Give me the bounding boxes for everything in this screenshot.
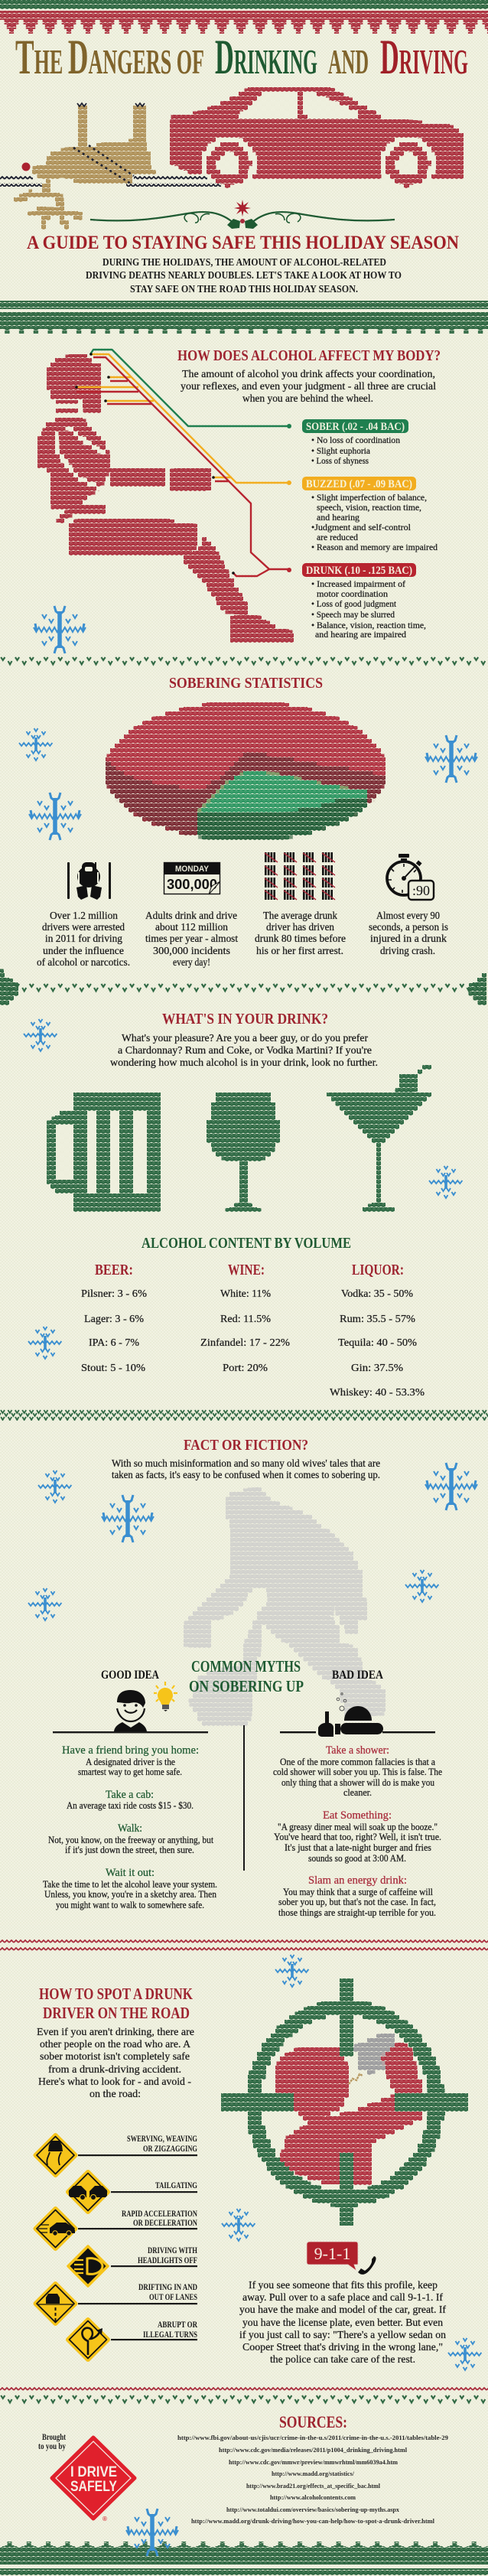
badge: drunk: DRUNK (.10 - .125 BAC): [306, 565, 412, 577]
list: sober effects: • Slight euphoria: [311, 445, 371, 456]
list: buzzed effects: speech, vision, reaction time,: [317, 502, 421, 513]
knit martini glass: [328, 1066, 430, 1213]
call to action paragraph: [239, 2280, 446, 2366]
column: beer: Pilsner: 3 - 6%: [81, 1288, 147, 1300]
icon: calendar 300,000: [164, 862, 220, 894]
column: good ideas: Wait it out:: [106, 1867, 155, 1879]
panel: sources and sponsor: [0, 2412, 488, 2575]
knit beer mug: [48, 1093, 159, 1212]
panel: how to spot a drunk driver: [35, 1955, 481, 2370]
logo: I Drive Safely: I DRIVE: [70, 2464, 117, 2480]
label: headlights off: DRIVING WITH: [148, 2246, 197, 2255]
icon: snowflake: [222, 2209, 255, 2241]
caption: incidents: 300,000 incidents: [153, 945, 230, 956]
intro paragraph: The amount of alcohol you drink affects your coordination,: [182, 368, 435, 379]
title: THE DANGERS OF: [15, 30, 204, 85]
column: wine: Port: 20%: [223, 1363, 268, 1374]
sign: swerving: [35, 2135, 197, 2175]
label: drifting: DRIFTING IN AND: [138, 2283, 197, 2292]
top knit border: [0, 0, 488, 34]
list: buzzed effects: [311, 492, 438, 552]
caption: incidents: every day!: [173, 956, 210, 968]
icon: light bulb: [154, 1682, 177, 1711]
column: good ideas: Take the time to let the alcohol leave your system.: [43, 1879, 217, 1890]
9-1-1 speech bubble: [307, 2242, 358, 2271]
column: bad ideas: Eat Something:: [323, 1809, 392, 1822]
intro paragraph: sober motorist isn't completely safe: [40, 2051, 190, 2063]
icon: snowflake: [429, 1166, 462, 1198]
column: good ideas: [43, 1744, 217, 1910]
icon: snowflake: [425, 735, 477, 783]
list: buzzed effects: are reduced: [317, 532, 358, 542]
column: beer: IPA: 6 - 7%: [89, 1337, 139, 1349]
list: drunk effects: • Balance, vision, reaction time,: [311, 620, 426, 630]
call to action paragraph: Cooper Street that's driving in the wrong lane,": [242, 2342, 443, 2353]
column: good ideas: An average taxi ride costs $15 - $30.: [67, 1800, 194, 1811]
icon: smiling person: [114, 1690, 147, 1731]
caption: incidents: Adults drink and drive: [145, 910, 237, 921]
source links: http://www.cdc.gov/mmwr/preview/mmwrhtml/mm6039a4.htm: [229, 2459, 398, 2466]
list: drunk effects: • Speech may be slurred: [311, 609, 395, 620]
flourish with poinsettia and holly: [90, 200, 395, 229]
icon: calendar 300,000: 300,000: [167, 877, 217, 892]
caption: arrests: in 2011 for driving: [45, 933, 122, 944]
title: DRINKING: [215, 30, 317, 85]
label: illegal turns: ILLEGAL TURNS: [143, 2330, 197, 2340]
intro paragraph: [37, 2027, 194, 2100]
sign: rapid acceleration: [35, 2209, 197, 2249]
knit bigfoot silhouette: [184, 1488, 386, 1728]
icon: snowflake: [102, 1495, 154, 1542]
label: bad idea: BAD IDEA: [332, 1669, 383, 1682]
column: bad ideas: those things are straight-up terrible for you.: [278, 1907, 436, 1918]
label: rapid acceleration: RAPID ACCELERATION: [122, 2210, 198, 2219]
caption: incidents: about 112 million: [155, 921, 228, 933]
sign: drifting: [35, 2284, 197, 2324]
column: bad ideas: It's just that a late-night burger and fries: [285, 1842, 431, 1853]
icon: snowflake: [126, 2509, 178, 2556]
title: AND: [328, 42, 369, 81]
call to action paragraph: If you see someone that fits this profile, keep: [249, 2280, 438, 2291]
label: tailgating: TAILGATING: [155, 2181, 197, 2190]
intro paragraph: [112, 1457, 380, 1480]
column: bad ideas: You may think that a surge of caffeine will: [283, 1887, 433, 1897]
knit crosshair with drunk driver: [223, 1980, 468, 2224]
column: bad ideas: cleaner.: [343, 1787, 372, 1798]
sources heading: SOURCES:: [279, 2412, 347, 2431]
label: good idea: GOOD IDEA: [101, 1669, 159, 1682]
column: good ideas: Have a friend bring you home:: [62, 1744, 199, 1757]
column: liquor: Rum: 35.5 - 57%: [340, 1314, 415, 1325]
column: liquor: LIQUOR:: [352, 1262, 404, 1278]
reindeer knit illustration: [0, 103, 221, 231]
sign: headlights off: [68, 2246, 197, 2286]
intro paragraph: on the road:: [89, 2089, 141, 2100]
label: swerving: [127, 2135, 197, 2154]
column: bad ideas: Take a shower:: [326, 1744, 389, 1757]
label: illegal turns: ABRUPT OR: [158, 2320, 198, 2330]
caption: times driven drunk: his or her first arrest.: [256, 945, 343, 956]
source links: http://www.cdc.gov/media/releases/2011/p1004_drinking_driving.html: [219, 2447, 408, 2454]
caption: injuries: injured in a drunk: [370, 933, 447, 944]
logo: I Drive Safely: SAFELY: [70, 2479, 117, 2495]
label: rapid acceleration: [122, 2210, 198, 2228]
icon: driver behind bars: [67, 862, 111, 900]
subheading: common myths: COMMON MYTHS: [191, 1657, 301, 1676]
icon: passed-out drunk with bottle: [280, 1693, 435, 1737]
source links: http://www.alcoholcontents.com: [270, 2494, 356, 2501]
column: bad ideas: sounds so good at 3:00 AM.: [308, 1853, 406, 1864]
knit driver figure: [39, 356, 294, 641]
call to action paragraph: if you just call to say: "There's a yellow sedan on: [239, 2330, 446, 2341]
icon: phone handset: [358, 2256, 376, 2275]
call to action paragraph: away. Pull over to a safe place and call 9-1-1. If: [242, 2292, 443, 2304]
column: bad ideas: Slam an energy drink:: [308, 1874, 407, 1887]
intro paragraph: With so much misinformation and so many old wives' tales that are: [112, 1457, 380, 1469]
heading: DRIVER ON THE ROAD: [43, 2004, 190, 2022]
column: liquor: Whiskey: 40 - 53.3%: [330, 1387, 425, 1399]
call to action paragraph: you have the make and model of the car, great. If: [239, 2304, 446, 2316]
icon: snowflake: [275, 1955, 308, 1987]
caption: injuries: seconds, a person is: [369, 921, 448, 933]
intro paragraph: Here's what to look for - and avoid -: [38, 2076, 191, 2088]
column: wine: Zinfandel: 17 - 22%: [200, 1337, 290, 1349]
source links: [177, 2434, 448, 2525]
caption: arrests: under the influence: [43, 945, 124, 956]
icon: snowflake: [425, 1463, 477, 1510]
column: wine: Red: 11.5%: [220, 1314, 271, 1325]
column: beer: Lager: 3 - 6%: [84, 1314, 144, 1325]
knit pie chart: [106, 702, 386, 840]
call to action paragraph: you have the license plate, even better. But even: [242, 2317, 443, 2329]
icon: snowflake: [34, 606, 86, 653]
label: headlights off: HEADLIGHTS OFF: [138, 2256, 197, 2265]
intro paragraph: [110, 1032, 378, 1068]
caption: times driven drunk: [255, 910, 346, 956]
column: good ideas: if it's just down the street, then sure.: [65, 1845, 194, 1855]
column: liquor: Tequila: 40 - 50%: [338, 1337, 417, 1349]
list: drunk effects: • Increased impairment of: [311, 578, 405, 589]
label: swerving: SWERVING, WEAVING: [127, 2135, 197, 2144]
intro text: DURING THE HOLIDAYS, THE AMOUNT OF ALCOHOL-RELATED: [102, 257, 386, 269]
caption: arrests: drivers were arrested: [42, 921, 125, 933]
knit wine glass: [207, 1094, 279, 1213]
brought to you by: [38, 2433, 66, 2451]
badge: sober: SOBER (.02 - .04 BAC): [306, 421, 405, 433]
list: drunk effects: [311, 578, 426, 640]
list: drunk effects: motor coordination: [317, 588, 388, 599]
body diagram connector lines: [75, 350, 291, 576]
column: wine: WINE:: [228, 1262, 265, 1278]
icon: calendar 300,000: MONDAY: [175, 865, 210, 874]
sign: illegal turns: [68, 2320, 197, 2359]
green knit border: [0, 301, 488, 334]
car knit illustration: [168, 86, 462, 192]
label: rapid acceleration: OR DECELERATION: [133, 2219, 198, 2228]
intro text: STAY SAFE ON THE ROAD THIS HOLIDAY SEASON.: [130, 284, 358, 295]
column: beer: Stout: 5 - 10%: [81, 1363, 145, 1374]
divider line: good idea: [53, 1731, 208, 1733]
intro paragraph: Even if you aren't drinking, there are: [37, 2027, 194, 2038]
column: bad ideas: You've heard that too, right? Well, it isn't true.: [274, 1832, 441, 1842]
list: buzzed effects: • Slight imperfection of balance,: [311, 492, 427, 503]
column: beer: [81, 1262, 147, 1374]
bottom knit border: [0, 2542, 488, 2575]
column: liquor: Vodka: 35 - 50%: [341, 1288, 413, 1300]
list: sober effects: [311, 435, 400, 466]
call to action paragraph: the police can take care of the rest.: [270, 2354, 415, 2366]
subheading: alcohol content: ALCOHOL CONTENT BY VOLUME: [142, 1235, 351, 1252]
column: good ideas: smartest way to get home safe.: [78, 1767, 182, 1777]
intro paragraph: from a drunk-driving accident.: [48, 2064, 181, 2076]
heading: FACT OR FICTION?: [184, 1437, 308, 1454]
icon: snowflake: [448, 2338, 481, 2370]
icon: snowflake: [28, 1588, 61, 1620]
intro paragraph: a Chardonnay? Rum and Coke, or Vodka Martini? If you're: [118, 1044, 372, 1056]
sign: tailgating: [68, 2172, 197, 2212]
icon: stopwatch: [387, 854, 434, 900]
label: illegal turns: [143, 2320, 198, 2340]
icon: snowflake: [19, 728, 52, 760]
title: [15, 30, 468, 85]
column: bad ideas: only thing that a shower will do is make you: [281, 1777, 435, 1788]
label: swerving: OR ZIGZAGGING: [143, 2144, 197, 2154]
panel: header: [0, 0, 488, 334]
intro text: [86, 257, 402, 295]
panel: how alcohol affects the body: [34, 347, 441, 653]
heading: HOW DOES ALCOHOL AFFECT MY BODY?: [177, 347, 441, 364]
column: good ideas: A designated driver is the: [86, 1757, 175, 1767]
intro paragraph: wondering how much alcohol is in your drink, look no further.: [110, 1057, 378, 1068]
caption: times driven drunk: driver has driven: [266, 921, 334, 933]
panel: what's in your drink: [24, 1011, 462, 1399]
source links: http://www.madd.org/statistics/: [272, 2470, 355, 2477]
source links: http://www.totaldui.com/overview/basics/sobering-up-myths.aspx: [226, 2506, 399, 2513]
label: drifting: OUT OF LANES: [149, 2293, 197, 2302]
caption: injuries: Almost every 90: [376, 910, 440, 921]
column: bad ideas: One of the more common fallacies is that a: [280, 1757, 435, 1767]
icon: snowflake: [28, 1327, 61, 1359]
column: wine: White: 11%: [220, 1288, 271, 1300]
logo: I Drive Safely: ®: [102, 2516, 107, 2522]
source links: http://www.madd.org/drunk-driving/how-you-can-help/how-to-spot-a-drunk-driver.html: [191, 2518, 435, 2525]
column: bad ideas: "A greasy diner meal will soak up the booze.": [278, 1822, 438, 1832]
column: bad ideas: cold shower will sober you up. This is false. The: [273, 1767, 442, 1777]
column: good ideas: you might want to walk to somewhere safe.: [56, 1900, 204, 1910]
label: headlights off: [138, 2246, 197, 2265]
caption: arrests: Over 1.2 million: [50, 910, 118, 921]
column: liquor: [330, 1262, 425, 1399]
intro paragraph: other people on the road who are. A: [40, 2039, 191, 2050]
icon: snowflake: [29, 793, 81, 840]
label: drifting: [138, 2283, 197, 2302]
column: good ideas: Unless, you know, you're in a sketchy area. Then: [44, 1889, 217, 1900]
caption: arrests: of alcohol or narcotics.: [37, 956, 130, 968]
column: bad ideas: [273, 1744, 442, 1918]
intro paragraph: your reflexes, and even your judgment - all three are crucial: [181, 380, 436, 392]
source links: http://www.fbi.gov/about-us/cjis/ucr/crime-in-the-u.s/2011/crime-in-the-u.s.-2011/tables/table-29: [177, 2434, 448, 2441]
icon: tally marks: [265, 852, 335, 900]
9-1-1 speech bubble: 9-1-1: [314, 2244, 350, 2263]
column: good ideas: Take a cab:: [106, 1789, 154, 1801]
brought to you by: to you by: [38, 2442, 66, 2451]
caption: incidents: times per year - almost: [145, 933, 238, 944]
icon: stopwatch: :90: [412, 883, 430, 898]
intro paragraph: taken as facts, it's easy to be confused when it comes to sobering up.: [112, 1469, 380, 1480]
heading: WHAT'S IN YOUR DRINK?: [162, 1011, 328, 1027]
icon: snowflake: [38, 1470, 71, 1503]
panel: fact or fiction: [28, 1437, 477, 1918]
panel: sobering statistics: [19, 675, 477, 968]
badge: buzzed: BUZZED (.07 - .09 BAC): [306, 478, 412, 490]
list: sober effects: • No loss of coordination: [311, 435, 400, 445]
column: liquor: Gin: 37.5%: [351, 1363, 403, 1374]
caption: incidents: [145, 910, 238, 968]
heading: SOBERING STATISTICS: [169, 675, 323, 692]
subheading: common myths: ON SOBERING UP: [189, 1677, 304, 1695]
caption: injuries: [369, 910, 448, 956]
list: drunk effects: • Loss of good judgment: [311, 598, 397, 609]
list: drunk effects: and hearing are impaired: [315, 629, 406, 640]
intro text: DRIVING DEATHS NEARLY DOUBLES. LET'S TAKE A LOOK AT HOW TO: [86, 270, 402, 282]
caption: arrests: [37, 910, 130, 968]
intro paragraph: What's your pleasure? Are you a beer guy, or do you prefer: [122, 1032, 369, 1044]
caption: injuries: driving crash.: [380, 945, 435, 956]
intro paragraph: when you are behind the wheel.: [242, 392, 373, 404]
column: wine: [200, 1262, 290, 1374]
list: buzzed effects: • Reason and memory are impaired: [311, 542, 438, 552]
heading: [39, 1985, 194, 2022]
caption: times driven drunk: The average drunk: [263, 910, 337, 921]
list: buzzed effects: •Judgment and self-control: [311, 522, 412, 532]
list: buzzed effects: and hearing: [317, 512, 359, 523]
list: sober effects: • Loss of shyness: [311, 455, 369, 466]
logo: I Drive Safely: [52, 2438, 135, 2522]
subheading: common myths: [189, 1657, 304, 1695]
intro paragraph: [181, 368, 436, 404]
heading: HOW TO SPOT A DRUNK: [39, 1985, 194, 2003]
column: good ideas: Walk:: [118, 1822, 142, 1835]
brought to you by: Brought: [42, 2433, 66, 2442]
column: beer: BEER:: [95, 1262, 133, 1278]
caption: times driven drunk: drunk 80 times before: [255, 933, 346, 944]
icon: snowflake: [24, 1019, 57, 1051]
column: good ideas: Not, you know, on the freeway or anything, but: [48, 1835, 213, 1845]
vertical divider: [243, 1725, 245, 1871]
column: bad ideas: sober you up, but that's not the case. In fact,: [278, 1897, 436, 1907]
source links: http://www.brad21.org/effects_at_specific_bac.html: [246, 2483, 381, 2490]
icon: snowflake: [405, 1570, 438, 1602]
